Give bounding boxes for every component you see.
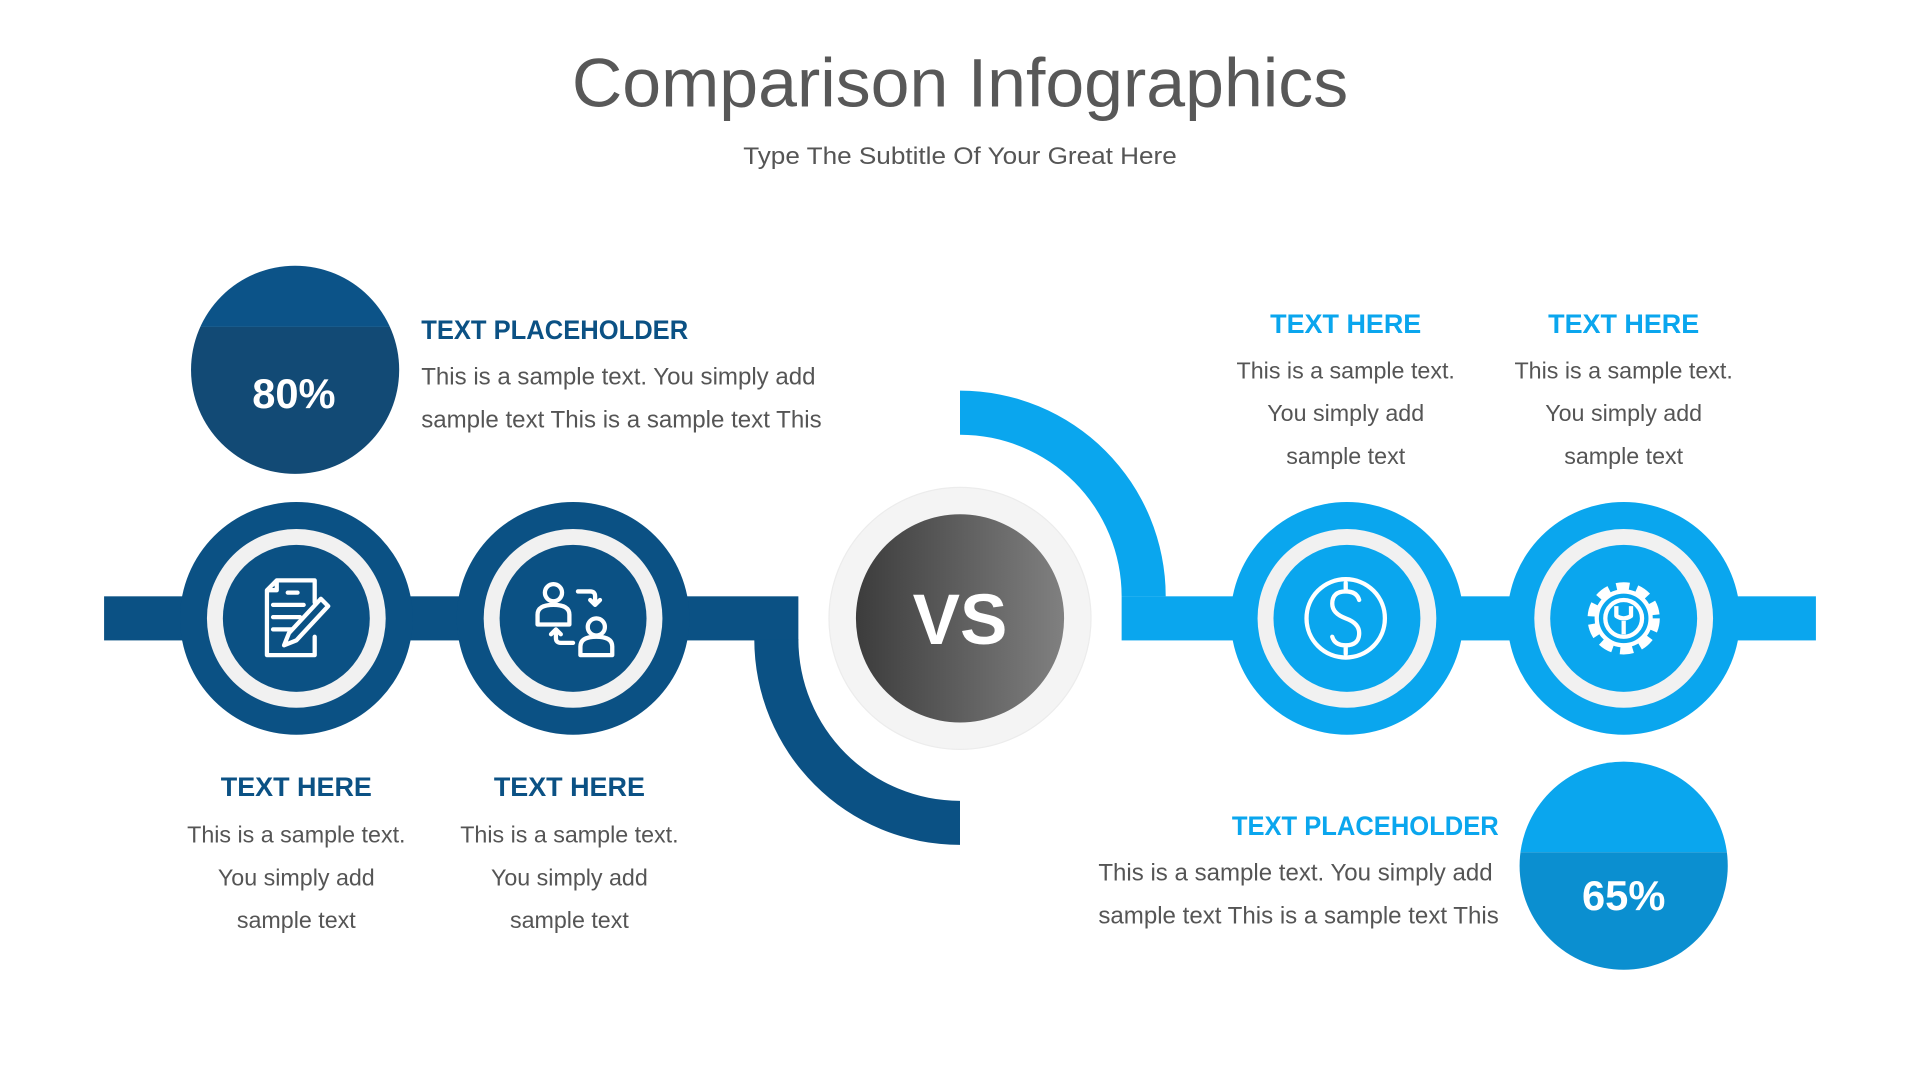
stat circle: 65% [1520,762,1728,970]
text block: bottom left 2 [460,772,679,933]
text block: right 1: TEXT HERE [1270,309,1421,339]
VS badge: VS [913,581,1007,660]
node: dollar icon [1231,502,1463,735]
text block: top left placeholder: This is a sample text. You simply add [421,363,816,390]
node: document icon [180,502,413,735]
text block: bottom left 2: TEXT HERE [494,772,645,802]
text block: right 1 [1237,309,1455,469]
text block: bottom left 1: TEXT HERE [221,772,372,802]
text block: bottom left 1: This is a sample text. [187,821,406,847]
text block: right 2: TEXT HERE [1548,309,1699,339]
text block: right 2: This is a sample text. [1514,357,1733,383]
left track [104,596,960,845]
text block: top left placeholder [421,315,822,433]
text block: bottom right placeholder: TEXT PLACEHOLDER [1232,811,1499,841]
text block: bottom left 1: You simply add [218,864,375,890]
text block: bottom right placeholder: This is a sample text. You simply add [1098,859,1493,886]
text block: bottom left 2: You simply add [491,864,648,890]
text block: right 1: sample text [1286,443,1406,469]
text block: bottom right placeholder: sample text This is a sample text This [1098,902,1499,929]
text block: right 1: This is a sample text. [1237,357,1455,383]
text block: bottom left 1: sample text [237,907,356,933]
text block: bottom left 1 [187,772,406,933]
text block: top left placeholder: TEXT PLACEHOLDER [421,315,688,345]
text block: bottom left 2: sample text [510,907,629,933]
text block: bottom right placeholder [1098,811,1499,929]
title: Comparison Infographics [572,45,1348,122]
stat circle: 80% [191,266,400,474]
node: gear icon [1507,502,1740,735]
VS badge [829,487,1091,749]
text block: right 1: You simply add [1267,400,1424,426]
text block: right 2 [1514,309,1733,469]
right track [960,391,1816,640]
node: people swap icon [457,502,689,735]
text block: bottom left 2: This is a sample text. [460,821,679,847]
subtitle: Type The Subtitle Of Your Great Here [743,143,1177,170]
text block: top left placeholder: sample text This is a sample text This [421,406,822,433]
text block: right 2: You simply add [1545,400,1702,426]
stat circle: 80%: 80% [252,370,336,417]
text block: right 2: sample text [1564,443,1684,469]
stat circle: 65%: 65% [1582,872,1665,919]
